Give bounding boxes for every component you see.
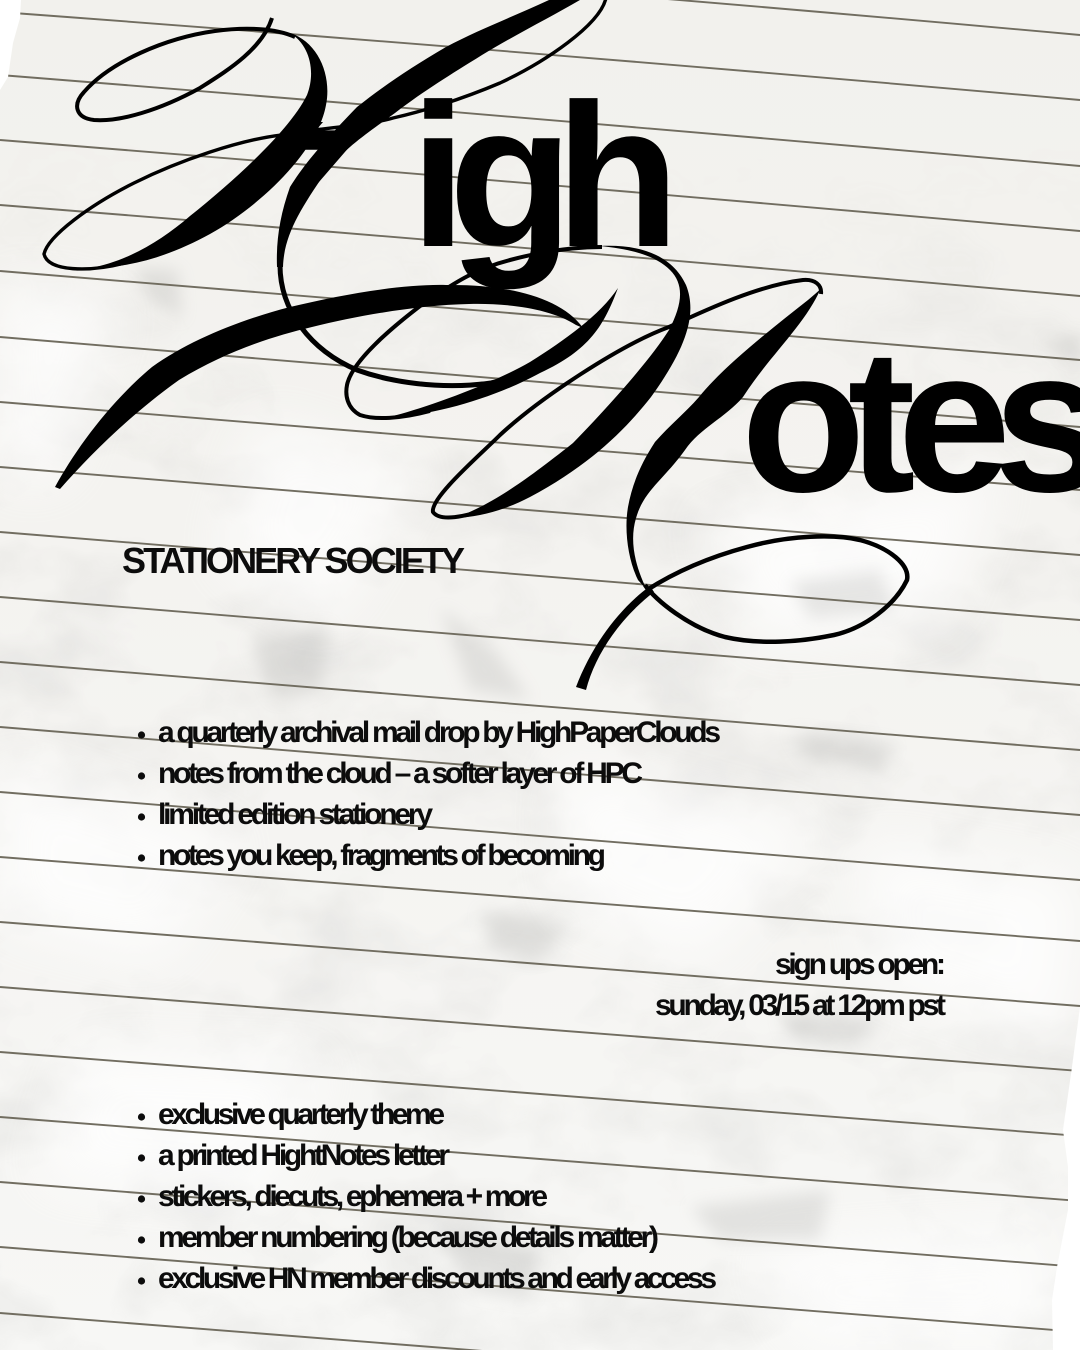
title: High Notes bbox=[44, 0, 1080, 690]
N swash: tail bbox=[576, 586, 654, 690]
title word: Notes bbox=[408, 220, 1080, 690]
H swash: large sweeping arc bbox=[55, 285, 583, 489]
bullet item 1: exclusive quarterly theme bbox=[158, 1098, 445, 1131]
H swash: left stem taper bbox=[90, 33, 327, 268]
list: about the mail drop bbox=[138, 716, 721, 872]
H swash: right stem bbox=[277, 0, 585, 267]
N swash: second stem bbox=[626, 288, 821, 590]
letters otes: otes bbox=[741, 307, 1080, 535]
H swash: crossing tail bbox=[385, 288, 618, 418]
N swash: bottom loop bbox=[645, 536, 907, 642]
bullet item 2: a printed HightNotes letter bbox=[158, 1139, 450, 1172]
bullet item 4: notes you keep, fragments of becoming bbox=[158, 839, 606, 872]
bullet item 4: member numbering (because details matter) bbox=[158, 1221, 659, 1254]
title word: High bbox=[44, 0, 667, 489]
bullet item 3: stickers, diecuts, ephemera + more bbox=[158, 1180, 548, 1213]
H swash: lower bowl bbox=[280, 265, 598, 386]
H swash: upper left loop and stem bbox=[77, 18, 295, 120]
H swash: small inner loop bbox=[346, 247, 602, 418]
bullet item 1: a quarterly archival mail drop by HighPaperClouds bbox=[158, 716, 721, 749]
bullet item 2: notes from the cloud – a softer layer of HPC bbox=[158, 757, 643, 790]
N swash: connecting hairline bbox=[433, 280, 821, 518]
bullet item 5: exclusive HN member discounts and early access bbox=[158, 1262, 717, 1295]
list: what is included bbox=[138, 1098, 717, 1295]
bullet item 3: limited edition stationery bbox=[158, 798, 433, 831]
letter N: N bbox=[408, 220, 882, 568]
letters igh: igh bbox=[410, 62, 667, 290]
date line: sunday, 03/15 at 12pm pst bbox=[655, 989, 946, 1022]
subtitle: STATIONERY SOCIETY bbox=[122, 540, 465, 581]
N swash: first stem bbox=[455, 246, 690, 518]
sign up date bbox=[655, 948, 946, 1022]
sign ups line: sign ups open: bbox=[775, 948, 946, 981]
H swash: lower left loop and hairline bbox=[44, 0, 606, 269]
